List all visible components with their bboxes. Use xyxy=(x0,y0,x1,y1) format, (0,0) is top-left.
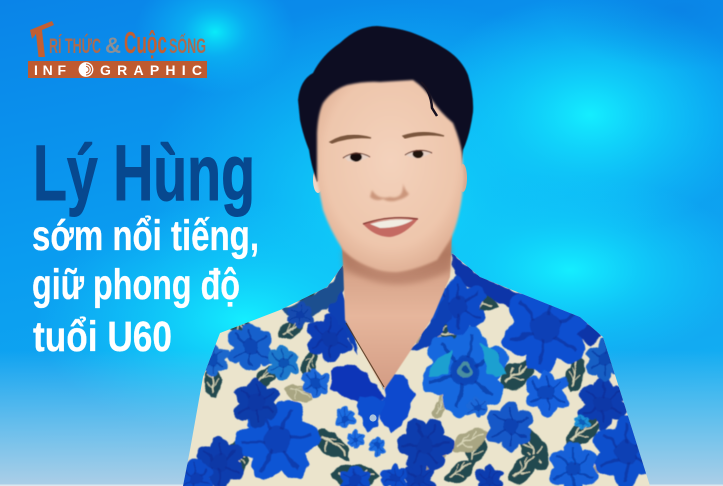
chin shadow xyxy=(342,245,452,285)
face xyxy=(317,80,464,272)
collar xyxy=(328,285,452,355)
left eyebrow xyxy=(330,135,371,143)
portrait: man in floral shirt xyxy=(174,26,665,486)
shirt pattern xyxy=(174,253,665,486)
logo infographic bar xyxy=(28,61,207,78)
logo wordmark: & xyxy=(105,33,121,58)
center flower detail xyxy=(428,345,507,384)
logo wordmark: SỐNG xyxy=(169,34,206,58)
right eye xyxy=(405,150,432,158)
subtitle line 1: sớm nổi tiếng, xyxy=(32,212,259,260)
forelock strand xyxy=(421,82,437,116)
necklace xyxy=(346,323,384,387)
subtitle line 3: tuổi U60 xyxy=(33,313,172,361)
logo wordmark: RÍ THỨC xyxy=(49,34,101,58)
shirt button xyxy=(369,414,377,422)
right eyebrow xyxy=(403,132,444,138)
hair back xyxy=(298,26,473,182)
left eye xyxy=(343,152,370,162)
floral shirt xyxy=(174,250,665,486)
title: Lý Hùng: Lý Hùng xyxy=(33,128,255,217)
logo infographic bar: INF xyxy=(34,62,66,78)
ear right xyxy=(459,164,467,192)
mouth xyxy=(363,218,418,237)
logo wordmark: Cuộc xyxy=(124,25,167,60)
ear left xyxy=(313,167,323,193)
logo: Trí Thức & Cuộc Sống Infographic xyxy=(28,21,207,78)
logo wordmark xyxy=(30,21,206,60)
logo infographic bar: GRAPHIC xyxy=(100,62,202,78)
nose xyxy=(370,183,409,201)
shirt placket flower xyxy=(331,364,414,434)
subtitle xyxy=(32,212,259,361)
neck xyxy=(341,235,452,390)
shirt leaves xyxy=(204,292,600,486)
subtitle line 2: giữ phong độ xyxy=(32,261,240,309)
shirt shoulder shading xyxy=(452,253,603,345)
shirt flowers xyxy=(174,274,665,486)
